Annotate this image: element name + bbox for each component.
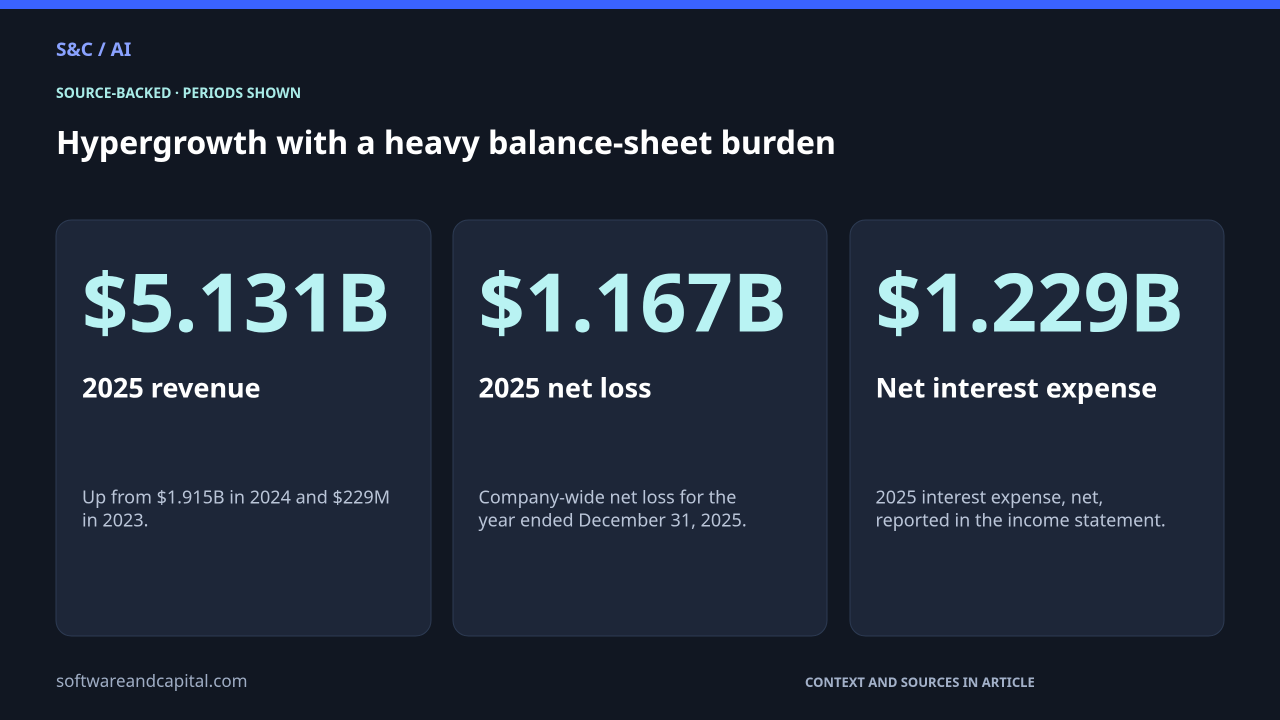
net loss label: 2025 net loss <box>478 368 652 405</box>
title: Hypergrowth with a heavy balance-sheet burden <box>56 121 836 164</box>
net loss description <box>478 485 747 532</box>
footer note: CONTEXT AND SOURCES IN ARTICLE <box>805 673 1035 691</box>
net loss description: Company-wide net loss for the <box>478 485 736 509</box>
revenue description: in 2023. <box>82 508 148 532</box>
panel: 2025 revenue <box>56 220 431 636</box>
interest expense description <box>876 485 1166 532</box>
net loss description: year ended December 31, 2025. <box>478 508 747 532</box>
net loss value: $1.167B <box>478 244 787 355</box>
top accent bar <box>0 0 1280 9</box>
revenue description <box>82 485 390 532</box>
interest expense label: Net interest expense <box>876 368 1157 405</box>
panel: net interest expense <box>849 220 1224 636</box>
interest expense description: reported in the income statement. <box>876 508 1166 532</box>
panel: 2025 net loss <box>452 220 828 636</box>
footer site name: softwareandcapital.com <box>56 669 248 692</box>
eyebrow: SOURCE-BACKED · PERIODS SHOWN <box>56 84 301 103</box>
brand mark: S&C / AI <box>56 36 131 62</box>
revenue description: Up from $1.915B in 2024 and $229M <box>82 485 390 509</box>
interest expense description: 2025 interest expense, net, <box>876 485 1103 509</box>
revenue value: $5.131B <box>82 244 390 355</box>
revenue label: 2025 revenue <box>82 368 261 405</box>
interest expense value: $1.229B <box>876 244 1184 355</box>
